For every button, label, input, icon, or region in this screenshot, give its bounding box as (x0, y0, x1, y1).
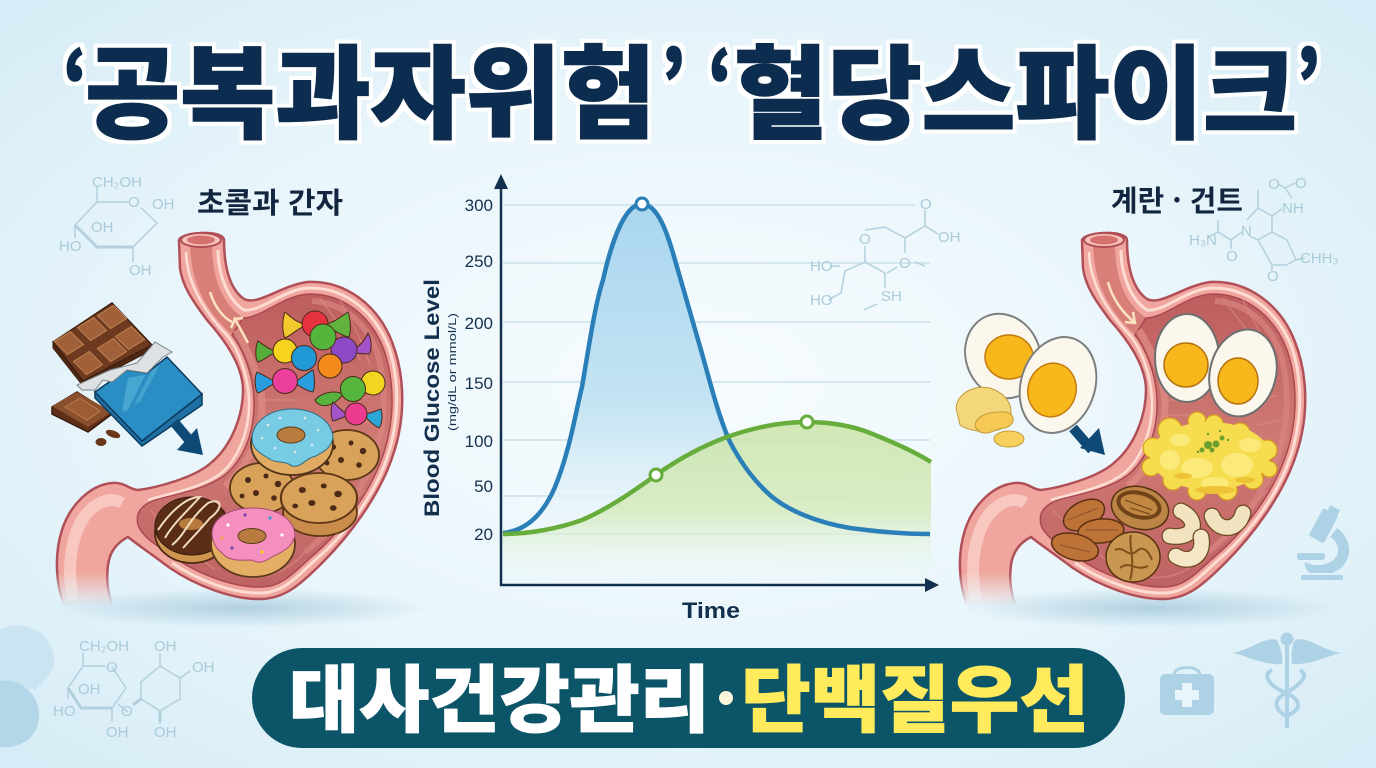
y tick labels: 50 (474, 477, 493, 496)
chemical structure top left: CH₂OH (92, 174, 142, 191)
y axis unit: (mg/dL or mmol/L) (447, 313, 459, 431)
chemical structure top left: OH (129, 262, 152, 279)
chemical structure bottom left: O (121, 703, 133, 720)
candies (255, 311, 385, 428)
chemical structure bottom left: OH (78, 681, 100, 698)
right stomach illustration (960, 233, 1305, 605)
y tick labels: 100 (465, 432, 493, 451)
chemical structure top left: OH (152, 196, 174, 213)
chocolate bar with blue wrapper (52, 303, 203, 455)
banner text white: 대사건강관리 (289, 642, 710, 748)
green curve area (503, 422, 931, 585)
chemical structure top right: O (1226, 248, 1238, 265)
title right phrase: ‘ (708, 17, 732, 135)
shadow under right stomach (960, 588, 1340, 628)
scrambled eggs (1142, 412, 1277, 500)
bottom banner (252, 642, 1125, 748)
chemical structure bottom left: HO (53, 703, 76, 720)
y tick labels: 20 (474, 525, 493, 544)
walnut (1106, 532, 1160, 582)
arrow into stomach (1073, 428, 1105, 455)
icon: medical kit (1160, 668, 1214, 715)
title right phrase: ’ (1296, 17, 1320, 135)
lower chocolate piece (52, 392, 121, 446)
chemical structure center: O (899, 255, 911, 272)
y tick labels: 200 (465, 314, 493, 333)
axes (494, 174, 939, 592)
decorative circles bottom left (0, 626, 54, 747)
chemical structure bottom left: OH (106, 724, 128, 741)
y axis title: Blood Glucose Level (420, 279, 444, 517)
chemical structure top right: O (1268, 176, 1280, 193)
chemical structure center: HO (810, 258, 832, 275)
blood glucose chart (420, 174, 939, 623)
chemical structure bottom left: O (106, 659, 118, 676)
esophagus arrow (1108, 282, 1135, 323)
chemical structure top right: O (1295, 175, 1307, 192)
chemical structure top left: O (128, 194, 140, 211)
y tick labels (465, 196, 493, 544)
gentle curve (503, 422, 931, 534)
arrow into stomach (174, 422, 203, 455)
banner text yellow: 단백질우선 (741, 642, 1089, 748)
chocolate donut (155, 497, 229, 563)
chemical structure center: O (920, 196, 932, 213)
chemical structure center: OH (938, 229, 960, 246)
walnut in shell (1107, 480, 1173, 536)
chemical structure top right: H₃N (1189, 232, 1217, 249)
blue donut (251, 409, 333, 475)
title right phrase: 혈당스파이크 (734, 14, 1297, 160)
label: left stomach heading: 초콜과 간자 (197, 180, 343, 222)
y tick labels: 250 (465, 252, 493, 271)
chemical structure top left: OH (91, 219, 114, 236)
marker green mid (650, 469, 662, 481)
upper chocolate bar (53, 303, 152, 386)
chemical structure center: HO (810, 292, 832, 309)
marker green peak (801, 416, 813, 428)
chemical structure bottom left: CH₂OH (79, 638, 129, 655)
chemical structure bottom left: OH (154, 638, 176, 655)
stomach shell (57, 233, 402, 605)
stomach shell (960, 233, 1305, 605)
icon: microscope (1297, 505, 1349, 580)
chemical structure center: SH (881, 288, 902, 305)
cashews (1170, 511, 1243, 559)
almonds (1048, 493, 1125, 566)
chemical structure top left (59, 174, 174, 279)
egg back (953, 302, 1053, 410)
chemical structure top left: HO (59, 238, 82, 255)
egg front (1008, 327, 1108, 443)
inner egg left (1155, 314, 1219, 402)
blue curve area (503, 204, 930, 534)
title left phrase: ’ (661, 17, 685, 135)
x axis title: Time (682, 598, 740, 623)
y tick labels: 300 (465, 196, 493, 215)
grid lines (503, 205, 930, 534)
left stomach illustration (57, 233, 402, 605)
inner egg right (1200, 322, 1286, 424)
shadow under left stomach (50, 588, 430, 628)
title left phrase: 공복과자위험 (85, 14, 656, 160)
esophagus arrow (210, 292, 248, 343)
banner dot (719, 691, 733, 705)
chemical structure center: O (859, 231, 871, 248)
chemical structure top right: NH (1282, 200, 1304, 217)
silver foil (77, 342, 172, 390)
y tick labels: 150 (465, 374, 493, 393)
spike curve (503, 204, 930, 534)
cookies (230, 430, 379, 536)
label: right stomach heading: 계란 · 건트 (1111, 178, 1243, 220)
chemical structure bottom left (53, 638, 214, 741)
broken pieces (956, 387, 1024, 447)
eggs outside right stomach (953, 302, 1108, 455)
blue wrapper (95, 357, 202, 446)
chemical structure bottom left: OH (192, 659, 214, 676)
chemical structure center (810, 196, 960, 310)
icon: caduceus (1233, 632, 1341, 728)
title (63, 14, 1320, 160)
herbs (1197, 430, 1229, 453)
marker blue peak (636, 198, 648, 210)
chemical structure bottom left: OH (154, 724, 176, 741)
chemical structure top right (1189, 175, 1339, 285)
pink donut (211, 508, 295, 577)
chemical structure top right: O (1267, 268, 1279, 285)
banner pill (252, 648, 1125, 748)
chemical structure top right: N (1241, 223, 1252, 240)
chemical structure top right: CHH₃ (1300, 250, 1339, 267)
title left phrase: ‘ (63, 17, 87, 135)
